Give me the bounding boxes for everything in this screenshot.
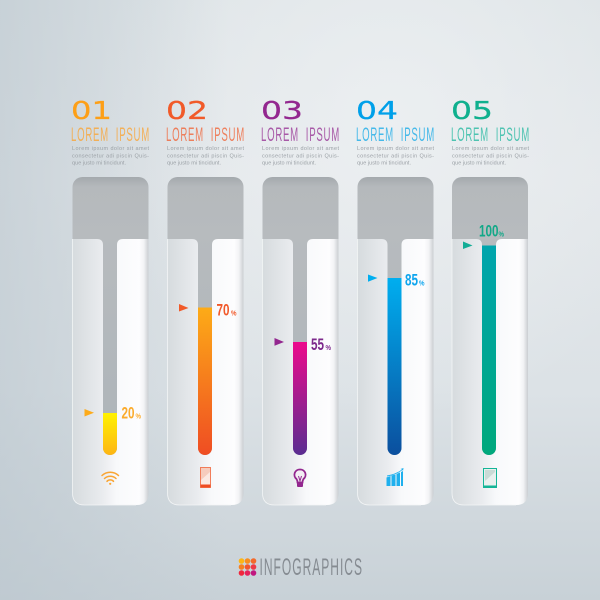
value 100%: 100 — [479, 222, 498, 240]
body text 04 — [357, 146, 434, 167]
heading number 01: 01 — [71, 96, 112, 125]
body text 03: consectetur adi piscin Quis- — [262, 153, 339, 159]
icon: tablet — [484, 468, 496, 488]
arrow marker 04 — [368, 274, 378, 282]
text: LOREM IPSUM — [261, 124, 340, 146]
body text 05: que justo mi tincidunt. — [452, 161, 506, 167]
card 05 — [452, 177, 528, 505]
body text 02: Lorem ipsum dolor sit amet — [167, 146, 244, 152]
body text 03: que justo mi tincidunt. — [262, 161, 316, 167]
icon: dot grid — [239, 558, 256, 576]
body text 01: consectetur adi piscin Quis- — [72, 153, 149, 159]
body text 01: Lorem ipsum dolor sit amet — [72, 146, 149, 152]
icon: phone — [200, 468, 210, 488]
body text 03: Lorem ipsum dolor sit amet — [262, 146, 339, 152]
value 55%: 55 — [311, 335, 324, 354]
panel: column 04 — [356, 96, 435, 505]
card 03 — [262, 177, 338, 505]
arrow marker 05 — [463, 242, 472, 249]
panel: column 01 — [71, 96, 150, 505]
body text 05: Lorem ipsum dolor sit amet — [452, 146, 529, 152]
body text 01: que justo mi tincidunt. — [72, 161, 126, 167]
value 100%: % — [498, 232, 505, 238]
text: LOREM IPSUM — [71, 124, 150, 146]
bar fill 55% — [293, 342, 307, 455]
heading number 04: 04 — [356, 96, 398, 125]
bar fill 70% — [198, 308, 212, 455]
text: LOREM IPSUM — [356, 124, 435, 146]
value 85%: 85 — [405, 270, 418, 290]
value 70%: % — [231, 310, 237, 318]
icon: bar chart — [386, 468, 404, 486]
heading number 03: 03 — [261, 96, 303, 125]
panel: column 05 — [451, 96, 530, 505]
body text 04: consectetur adi piscin Quis- — [357, 153, 434, 159]
heading number 05: 05 — [451, 96, 493, 125]
arrow marker 01 — [84, 409, 94, 416]
icon: wifi — [102, 472, 118, 485]
arrow marker 02 — [179, 304, 188, 312]
body text 03 — [262, 146, 339, 167]
value 20%: 20 — [122, 404, 134, 423]
value 85%: % — [419, 280, 425, 288]
bar fill 20% — [103, 413, 117, 455]
card 02 — [168, 177, 244, 505]
logo text: INFOGRAPHICS — [260, 554, 363, 581]
body text 02: que justo mi tincidunt. — [167, 161, 221, 167]
heading number 02: 02 — [166, 96, 208, 125]
arrow marker 03 — [274, 338, 284, 346]
logo — [239, 554, 363, 581]
bar fill 85% — [388, 278, 402, 455]
panel: column 03 — [261, 96, 340, 505]
body text 02: consectetur adi piscin Quis- — [167, 153, 244, 159]
card 01 — [72, 177, 148, 505]
panel: column 02 — [166, 96, 245, 505]
value 55%: % — [326, 345, 332, 352]
bar fill 100% — [482, 246, 496, 455]
value 70%: 70 — [216, 300, 230, 320]
body text 05: consectetur adi piscin Quis- — [452, 153, 529, 159]
value 20%: % — [136, 414, 142, 421]
body text 05 — [452, 146, 529, 167]
body text 01 — [72, 146, 149, 167]
icon: light bulb — [294, 469, 306, 487]
text: LOREM IPSUM — [166, 124, 245, 146]
card 04 — [358, 177, 434, 505]
body text 02 — [167, 146, 244, 167]
body text 04: Lorem ipsum dolor sit amet — [357, 146, 434, 152]
body text 04: que justo mi tincidunt. — [357, 161, 411, 167]
